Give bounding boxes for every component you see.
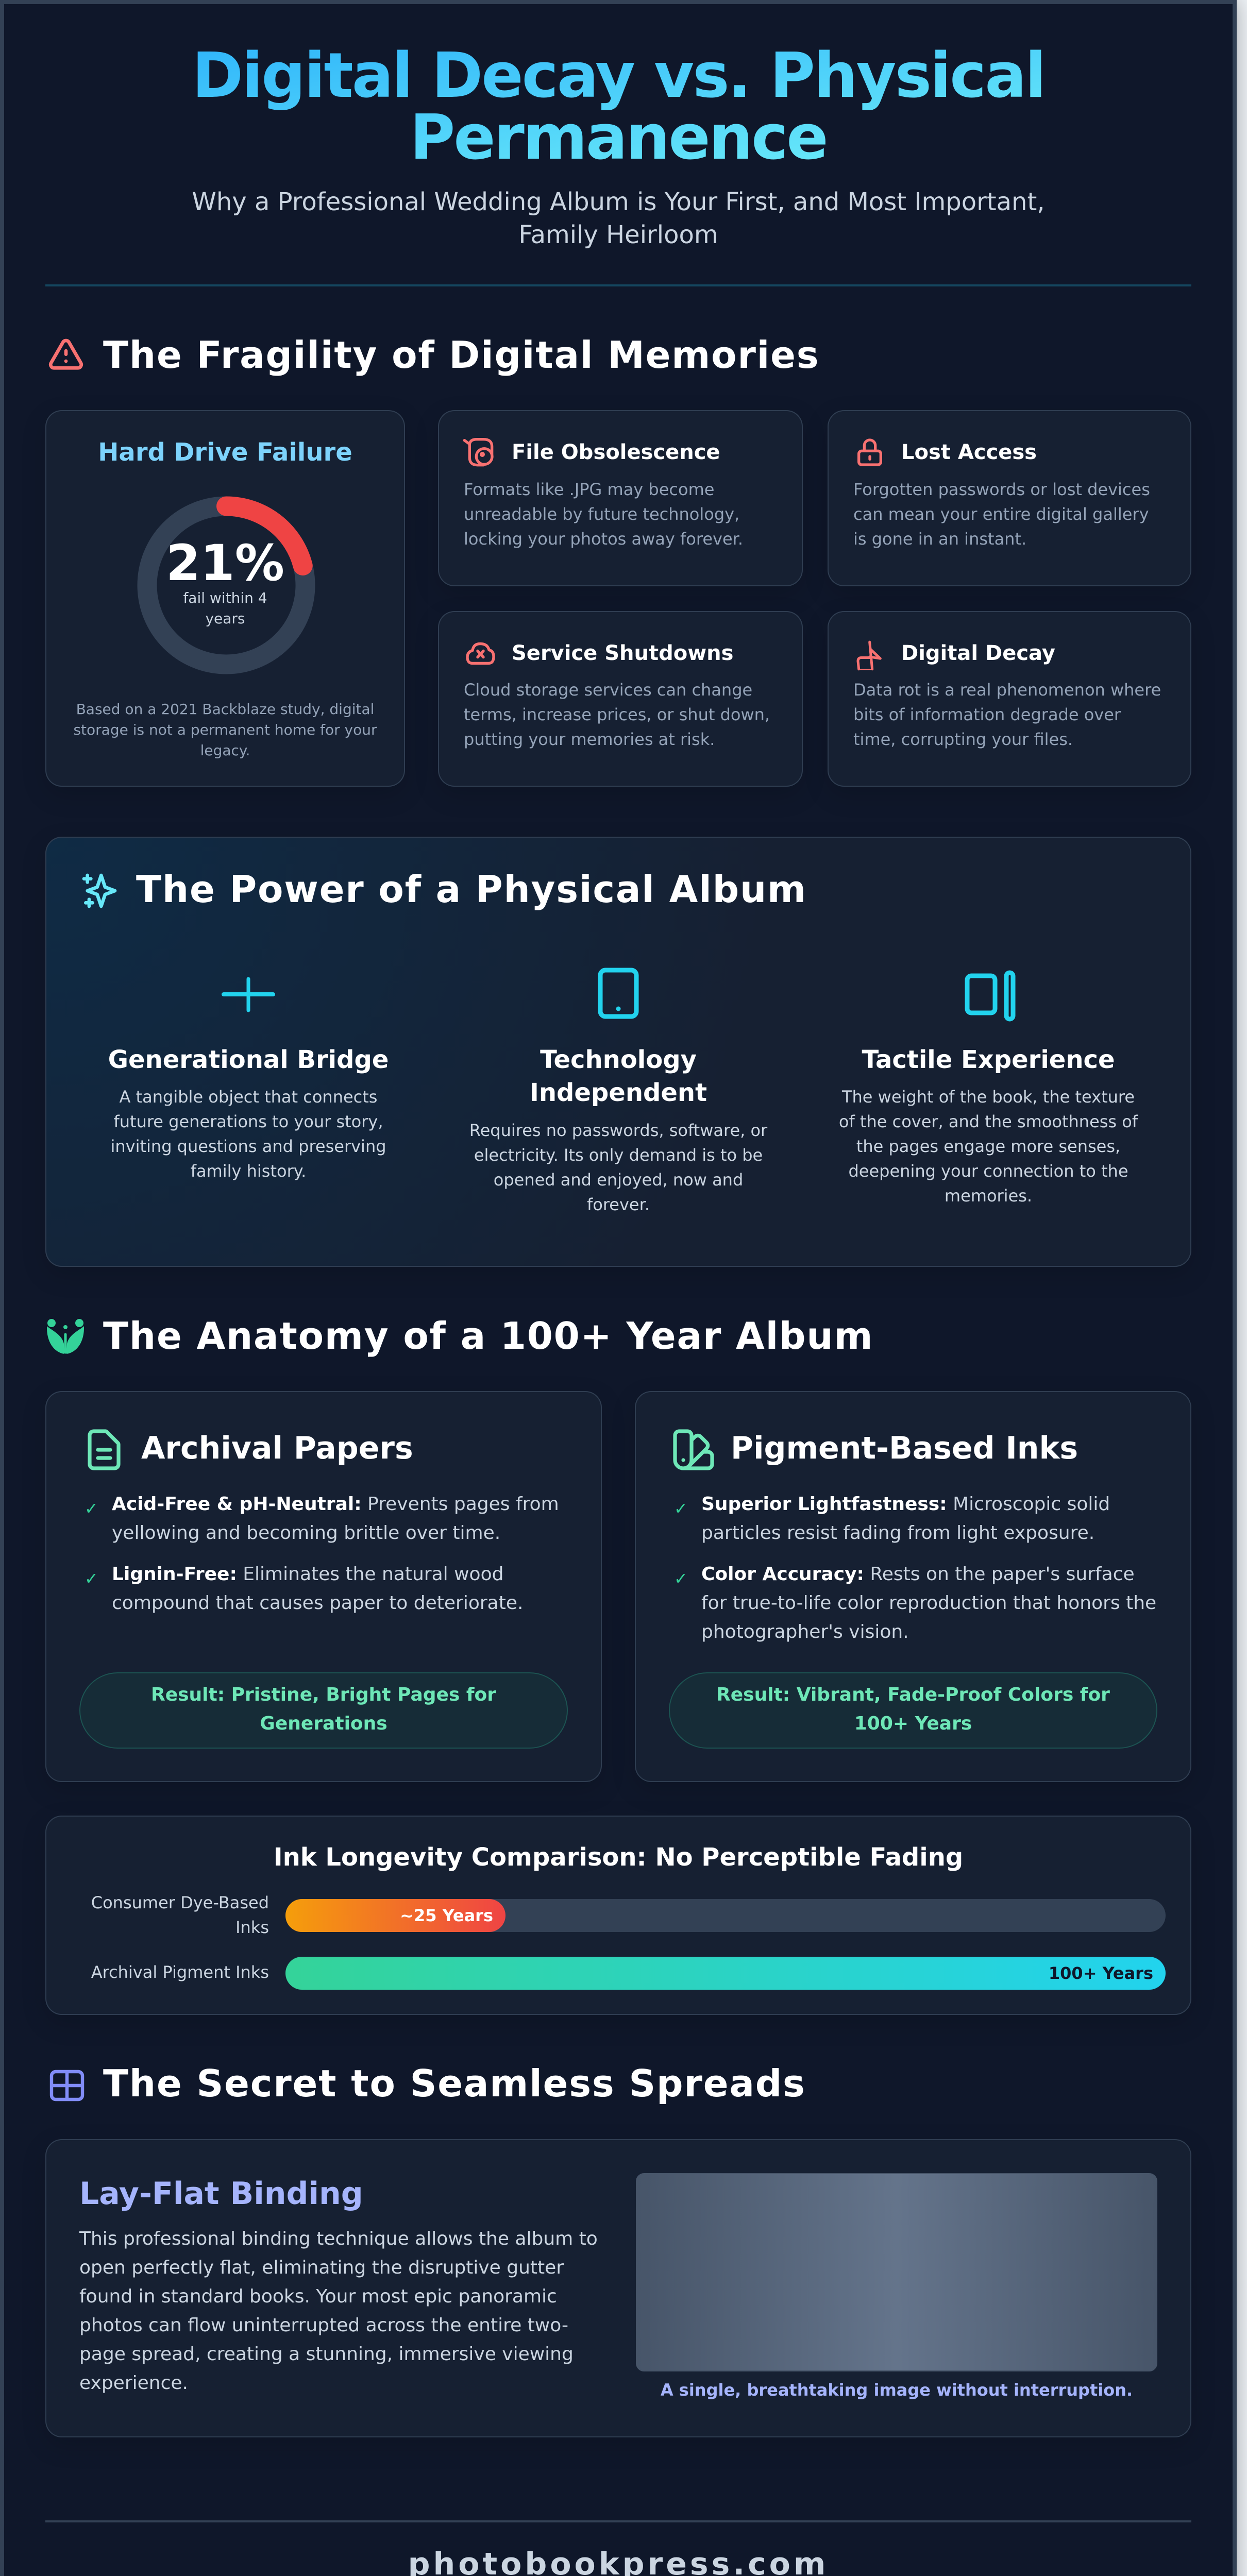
card text: locking your photos away forever. <box>464 529 743 548</box>
panel heading: Lay-Flat Binding <box>79 2176 363 2212</box>
card text: time, corrupting your files. <box>853 730 1073 749</box>
panel text: photos can flow uninterrupted across the entire two- <box>79 2315 568 2336</box>
panel: lay-flat binding <box>45 2139 1191 2437</box>
list item: lightfastness: Superior Lightfastness: Microscopic solid <box>701 1493 1110 1515</box>
column title: generational bridge: Generational Bridge <box>108 1045 389 1074</box>
icon: plus <box>217 963 279 1025</box>
source note: legacy. <box>200 742 250 759</box>
column title: technology independent <box>438 1043 799 1109</box>
list item: lightfastness: particles resist fading from light exposure. <box>701 1522 1094 1544</box>
section heading: The Power of a Physical Album <box>136 868 807 911</box>
list item: lightfastness <box>701 1490 1110 1548</box>
result pill: Result: Vibrant, Fade-Proof Colors for <box>716 1684 1110 1705</box>
icon: tablet <box>587 962 649 1024</box>
icon: sparkles <box>79 870 120 911</box>
donut caption: fail within 4 <box>183 589 267 606</box>
card title: Digital Decay <box>901 641 1055 665</box>
icon: file obsolescence <box>462 436 495 469</box>
result pill: Generations <box>260 1713 387 1734</box>
column title: technology independent: Technology <box>540 1045 697 1074</box>
donut caption: years <box>205 610 245 627</box>
bar: pigment 100+ years <box>285 1957 1166 1990</box>
column text: tactile experience: memories. <box>945 1186 1032 1206</box>
section heading: seamless spreads <box>45 2063 823 2105</box>
panel: ink longevity chart <box>45 1816 1191 2015</box>
icon: green sprout <box>45 1316 87 1358</box>
card text: Data rot is a real phenomenon where <box>853 680 1161 700</box>
result pill: Result: Pristine, Bright Pages for <box>151 1684 496 1705</box>
panel heading: Hard Drive Failure <box>98 438 352 467</box>
column text: generational bridge: family history. <box>191 1161 306 1181</box>
bar label: dye: Inks <box>235 1918 269 1937</box>
card text <box>853 477 1150 551</box>
bar value: dye: ~25 Years <box>400 1906 493 1925</box>
panel text: open perfectly flat, eliminating the disruptive gutter <box>79 2257 564 2278</box>
icon: grid window <box>45 2064 87 2105</box>
panel text: This professional binding technique allows the album to <box>79 2228 598 2249</box>
card text: putting your memories at risk. <box>464 730 715 749</box>
bar: dye 25 years <box>285 1899 1166 1932</box>
card text: terms, increase prices, or shut down, <box>464 705 770 724</box>
title <box>180 45 1056 169</box>
column text: technology independent: forever. <box>587 1194 650 1214</box>
panel: power of a physical album <box>45 837 1191 1267</box>
card text: is gone in an instant. <box>853 529 1026 548</box>
chart title: Ink Longevity Comparison: No Perceptible Fading <box>274 1843 963 1872</box>
source note: Based on a 2021 Backblaze study, digital <box>76 701 374 718</box>
panel: lost access <box>828 410 1191 586</box>
bar value: pigment: 100+ Years <box>1049 1963 1153 1983</box>
check mark: ✓ <box>85 1569 98 1588</box>
panel: file obsolescence <box>438 410 803 586</box>
list item: lignin-free: compound that causes paper to deteriorate. <box>112 1592 523 1614</box>
panel: pigment-based inks <box>635 1391 1191 1782</box>
subtitle: Family Heirloom <box>518 221 718 249</box>
bar label: dye: Consumer Dye-Based <box>91 1893 269 1912</box>
check mark: ✓ <box>674 1499 688 1518</box>
subtitle: Why a Professional Wedding Album is Your First, and Most Important, <box>192 188 1045 216</box>
icon: padlock <box>853 436 886 469</box>
list item: lignin-free <box>112 1560 523 1618</box>
column text: tactile experience: of the cover, and the smoothness of <box>839 1112 1138 1131</box>
title: Permanence <box>410 102 827 174</box>
panel: hard drive failure <box>45 410 405 787</box>
icon: cloud with x <box>464 637 497 670</box>
column text: technology independent: Requires no passwords, software, or <box>469 1120 767 1140</box>
bar fill: dye <box>285 1899 505 1932</box>
image caption: A single, breathtaking image without interruption. <box>661 2380 1133 2400</box>
column title: tactile experience: Tactile Experience <box>862 1045 1115 1074</box>
icon: warning triangle <box>48 339 83 370</box>
card text: bits of information degrade over <box>853 705 1121 724</box>
column text: generational bridge <box>68 1084 429 1183</box>
donut chart: 21 percent <box>137 497 315 674</box>
column text: tactile experience: The weight of the book, the texture <box>842 1087 1135 1107</box>
heading text: The Secret to Seamless Spreads <box>103 2062 806 2105</box>
panel text: experience. <box>79 2372 188 2394</box>
list item: colour accuracy: Color Accuracy: Rests on the paper's surface <box>701 1563 1135 1585</box>
heading text: The Anatomy of a 100+ Year Album <box>103 1314 873 1358</box>
panel text: page spread, creating a stunning, immersive viewing <box>79 2344 574 2365</box>
check mark: ✓ <box>85 1499 98 1518</box>
donut caption <box>183 589 267 627</box>
result pill <box>79 1672 568 1749</box>
icon: document <box>79 1425 129 1475</box>
card title: Pigment-Based Inks <box>731 1430 1078 1466</box>
column text: technology independent <box>438 1118 799 1217</box>
card text: Forgotten passwords or lost devices <box>853 479 1150 499</box>
donut value: 21% <box>166 534 284 592</box>
column text: technology independent: electricity. Its only demand is to be <box>474 1145 763 1164</box>
check mark: ✓ <box>674 1569 688 1588</box>
list item: acid-free <box>112 1490 559 1548</box>
column text: generational bridge: A tangible object that connects <box>120 1087 377 1107</box>
column text: generational bridge: future generations to your story, <box>113 1112 383 1131</box>
list item: colour accuracy <box>701 1560 1156 1647</box>
list item: colour accuracy: photographer's vision. <box>701 1621 909 1642</box>
card title: Archival Papers <box>141 1430 413 1466</box>
card title: File Obsolescence <box>512 440 720 464</box>
bar label: pigment: Archival Pigment Inks <box>91 1962 269 1982</box>
image placeholder: panoramic spread <box>636 2173 1157 2371</box>
card text: Formats like .JPG may become <box>464 479 714 499</box>
title: Digital Decay vs. Physical <box>192 40 1044 112</box>
panel: digital decay <box>828 611 1191 787</box>
column text: tactile experience <box>808 1084 1169 1208</box>
icon: digital decay <box>853 637 886 670</box>
column text: technology independent: opened and enjoyed, now and <box>494 1170 743 1189</box>
panel text <box>79 2225 598 2398</box>
card text <box>464 477 743 551</box>
card title: Service Shutdowns <box>512 641 733 665</box>
panel: service shutdowns <box>438 611 803 787</box>
heading text: The Fragility of Digital Memories <box>103 333 819 377</box>
subtitle <box>192 188 1045 249</box>
list item: colour accuracy: for true-to-life color reproduction that honors the <box>701 1592 1156 1614</box>
list item: acid-free: yellowing and becoming brittle over time. <box>112 1522 500 1544</box>
icon: colour swatch <box>669 1425 718 1475</box>
card text <box>853 677 1161 752</box>
source note <box>45 699 405 761</box>
column text: generational bridge: inviting questions and preserving <box>110 1137 386 1156</box>
result pill: 100+ Years <box>854 1713 972 1734</box>
list item: lignin-free: Lignin-Free: Eliminates the natural wood <box>112 1563 503 1585</box>
icon: book pages <box>957 962 1019 1024</box>
card title: Lost Access <box>901 440 1037 464</box>
card text: unreadable by future technology, <box>464 504 739 523</box>
card text: Cloud storage services can change <box>464 680 752 700</box>
source note: storage is not a permanent home for your <box>73 721 377 738</box>
list item: acid-free: Acid-Free & pH-Neutral: Prevents pages from <box>112 1493 559 1515</box>
section heading: fragility <box>48 333 819 377</box>
card text: can mean your entire digital gallery <box>853 504 1149 523</box>
column title: technology independent: Independent <box>530 1078 707 1107</box>
result pill <box>669 1672 1157 1749</box>
card text <box>464 677 770 752</box>
column text: tactile experience: the pages engage more senses, <box>856 1137 1120 1156</box>
column text: tactile experience: deepening your connection to the <box>848 1161 1128 1181</box>
panel: archival papers <box>45 1391 602 1782</box>
bar label: dye <box>66 1890 269 1939</box>
section heading: anatomy <box>45 1315 880 1358</box>
panel text: found in standard books. Your most epic panoramic <box>79 2286 557 2307</box>
